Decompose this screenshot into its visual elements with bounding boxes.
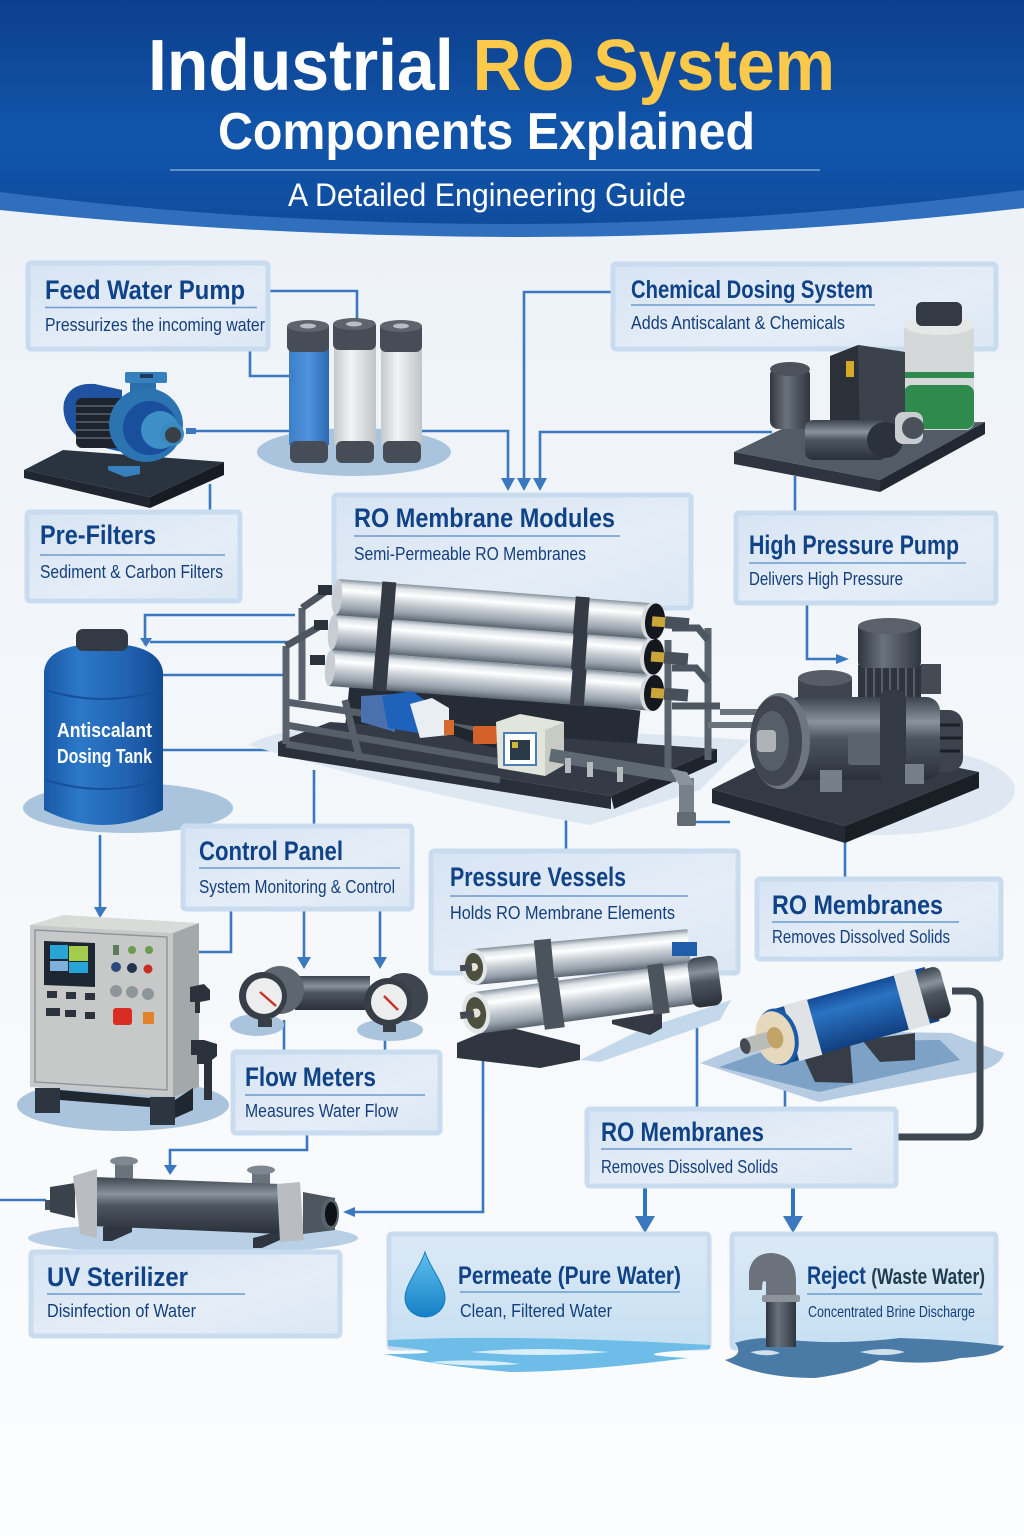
icon: antiscalant dosing tank	[23, 629, 233, 833]
icon: pre-filter cartridges	[257, 318, 451, 476]
description: Semi-Permeable RO Membranes	[354, 544, 586, 564]
description: Concentrated Brine Discharge	[808, 1304, 975, 1321]
rack control box	[496, 714, 564, 776]
icon: chemical dosing system	[734, 302, 985, 492]
upper vessel	[458, 926, 691, 989]
membrane vessel 3	[324, 649, 689, 714]
outlet pipe	[550, 755, 696, 826]
waste water surface	[725, 1338, 1004, 1378]
panel: feed water pump	[28, 263, 268, 349]
subtitle: A Detailed Engineering Guide	[288, 177, 686, 213]
icon: UV sterilizer	[45, 1156, 339, 1248]
panel: RO membranes lower	[587, 1109, 896, 1186]
panel: control panel	[183, 826, 412, 909]
water surface	[384, 1338, 710, 1372]
description: System Monitoring & Control	[199, 877, 395, 897]
header banner	[0, 0, 1024, 237]
heading: Feed Water Pump	[45, 275, 245, 305]
icon: control cabinet	[17, 915, 229, 1131]
panel: chemical dosing system	[613, 264, 996, 349]
rack frame	[278, 590, 760, 809]
heading: Pre-Filters	[40, 520, 156, 550]
dosing pump on rack	[361, 691, 497, 748]
connector lines	[0, 291, 849, 1233]
icon: high pressure pump	[712, 618, 1015, 843]
touch screen	[44, 941, 95, 987]
description: Holds RO Membrane Elements	[450, 903, 675, 923]
buttons	[46, 945, 154, 1025]
panel: high pressure pump	[736, 513, 996, 603]
panel: pressure vessels	[431, 851, 738, 973]
icon: discharge elbow pipe	[749, 1253, 800, 1347]
tank label: Antiscalant	[57, 720, 152, 742]
panel: pre-filters	[27, 512, 240, 601]
panel: reject	[725, 1234, 1004, 1378]
description: Adds Antiscalant & Chemicals	[631, 313, 845, 333]
heading: Flow Meters	[245, 1062, 376, 1092]
side handles	[190, 984, 217, 1100]
title line 2: Components Explained	[218, 103, 755, 161]
heading: UV Sterilizer	[47, 1262, 188, 1292]
heading: RO Membranes	[601, 1117, 764, 1147]
heading: Reject (Waste Water)	[807, 1262, 985, 1290]
icon: flow meters	[230, 966, 428, 1041]
heading: Chemical Dosing System	[631, 276, 873, 304]
reject pipe	[898, 991, 980, 1137]
panel: permeate	[384, 1234, 710, 1372]
description: Removes Dissolved Solids	[601, 1157, 778, 1177]
icon: water drop	[405, 1252, 445, 1317]
icon: feed water pump	[24, 372, 224, 508]
description: Pressurizes the incoming water	[45, 315, 265, 335]
description: Removes Dissolved Solids	[772, 927, 950, 947]
title line 1: Industrial RO System	[148, 26, 835, 106]
heading: Pressure Vessels	[450, 862, 626, 892]
description: Clean, Filtered Water	[460, 1301, 612, 1321]
panel: flow meters	[233, 1052, 440, 1133]
tank label: Dosing Tank	[57, 746, 153, 768]
icon: RO membrane element	[700, 962, 1004, 1137]
membrane vessel 1	[331, 578, 690, 643]
description: Measures Water Flow	[245, 1101, 399, 1121]
panel: RO membrane modules	[334, 495, 691, 608]
panel: RO membranes upper	[757, 879, 1001, 959]
heading: Control Panel	[199, 836, 343, 866]
icon: pressure vessels	[457, 926, 731, 1068]
heading: High Pressure Pump	[749, 530, 959, 560]
heading: Permeate (Pure Water)	[458, 1262, 681, 1290]
heading: RO Membrane Modules	[354, 503, 615, 533]
lower vessel	[457, 955, 723, 1041]
membrane vessel 2	[327, 613, 689, 678]
heading: RO Membranes	[772, 890, 943, 920]
panel: UV sterilizer	[28, 1222, 358, 1336]
icon: RO membrane rack	[248, 578, 760, 826]
description: Delivers High Pressure	[749, 569, 903, 589]
description: Disinfection of Water	[47, 1301, 196, 1321]
description: Sediment & Carbon Filters	[40, 562, 223, 582]
